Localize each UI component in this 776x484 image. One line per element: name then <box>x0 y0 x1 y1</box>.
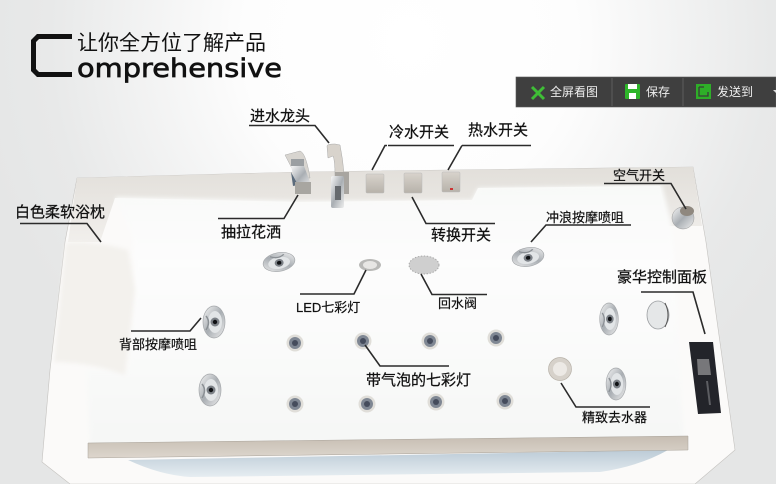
dropdown arrow <box>773 90 776 93</box>
fullscreen label: 全屏看图 <box>550 84 598 99</box>
toolbar <box>516 77 776 107</box>
bubble light <box>286 396 304 412</box>
callout: 回水阀 <box>421 274 487 311</box>
callout: LED七彩灯: LED七彩灯 <box>296 300 360 315</box>
tub top rim <box>68 167 702 242</box>
tub basin <box>86 185 684 444</box>
callout: 热水开关: 热水开关 <box>468 122 528 139</box>
callout: 背部按摩喷咀: 背部按摩喷咀 <box>119 337 197 352</box>
bubble light <box>354 332 372 350</box>
callout: 冲浪按摩喷咀 <box>531 210 631 242</box>
callout: LED七彩灯 <box>296 270 366 315</box>
icon: send <box>696 84 711 99</box>
air switch <box>672 206 694 229</box>
callout: 回水阀: 回水阀 <box>438 296 477 311</box>
side light <box>647 301 669 329</box>
switch: hot water <box>442 172 460 192</box>
callout: 精致去水器 <box>561 383 650 425</box>
tub front stainless bar <box>88 436 688 458</box>
title large C letter <box>34 36 72 74</box>
callout: 白色柔软浴枕 <box>15 204 105 242</box>
jet: top right <box>511 245 545 269</box>
callout: 进水龙头: 进水龙头 <box>250 108 310 125</box>
bubble light <box>488 330 504 346</box>
jet: right upper <box>600 303 618 335</box>
title Chinese heading: 让你全方位了解产品 <box>77 32 266 55</box>
title English word: omprehensive <box>77 54 282 84</box>
headrest pillow <box>54 242 135 375</box>
icon: fullscreen <box>532 87 544 99</box>
bubble light <box>496 392 514 410</box>
jet: back lower <box>199 374 221 406</box>
title <box>34 32 282 84</box>
jet: top left <box>262 250 296 274</box>
return valve <box>409 256 439 274</box>
switch: diverter <box>404 173 422 193</box>
tub front glass panel <box>128 450 668 477</box>
bubble light <box>286 334 304 352</box>
faucet: water inlet spout <box>327 144 349 208</box>
callout: 空气开关: 空气开关 <box>613 168 665 183</box>
callout: 冲浪按摩喷咀: 冲浪按摩喷咀 <box>546 210 624 225</box>
jet: right lower <box>606 368 626 400</box>
callout: 抽拉花洒: 抽拉花洒 <box>221 224 281 241</box>
save label: 保存 <box>646 85 670 99</box>
callout: 带气泡的七彩灯 <box>365 345 471 389</box>
bathtub <box>42 167 735 484</box>
icon: save <box>625 84 640 99</box>
LED light <box>359 259 381 271</box>
callout: 热水开关 <box>448 122 531 170</box>
callout: 背部按摩喷咀 <box>119 318 201 352</box>
bubble light <box>422 332 438 350</box>
send label: 发送到 <box>717 84 753 99</box>
jet: back upper <box>203 306 225 338</box>
callout: 抽拉花洒 <box>218 195 298 241</box>
faucet: pull-out shower <box>285 151 311 194</box>
callout: 精致去水器: 精致去水器 <box>582 410 647 425</box>
callout: 冷水开关 <box>372 124 454 170</box>
callout: 转换开关: 转换开关 <box>431 227 491 244</box>
tub outer shell <box>42 167 735 484</box>
bubble lights <box>286 330 514 412</box>
callout: 白色柔软浴枕: 白色柔软浴枕 <box>15 204 105 221</box>
callout: 进水龙头 <box>249 108 329 143</box>
callout: 豪华控制面板: 豪华控制面板 <box>617 268 707 286</box>
callout: 冷水开关: 冷水开关 <box>389 124 449 141</box>
callout: 转换开关 <box>412 197 495 244</box>
jets <box>199 245 626 406</box>
drain <box>548 358 572 380</box>
control panel <box>689 342 721 414</box>
switch: cold water <box>366 174 384 193</box>
callout: 豪华控制面板 <box>617 268 707 334</box>
callout: 空气开关 <box>604 168 686 209</box>
bubble light <box>428 394 444 410</box>
toolbar separators <box>612 78 683 106</box>
callout: 带气泡的七彩灯: 带气泡的七彩灯 <box>366 372 471 389</box>
bubble light <box>358 396 376 412</box>
